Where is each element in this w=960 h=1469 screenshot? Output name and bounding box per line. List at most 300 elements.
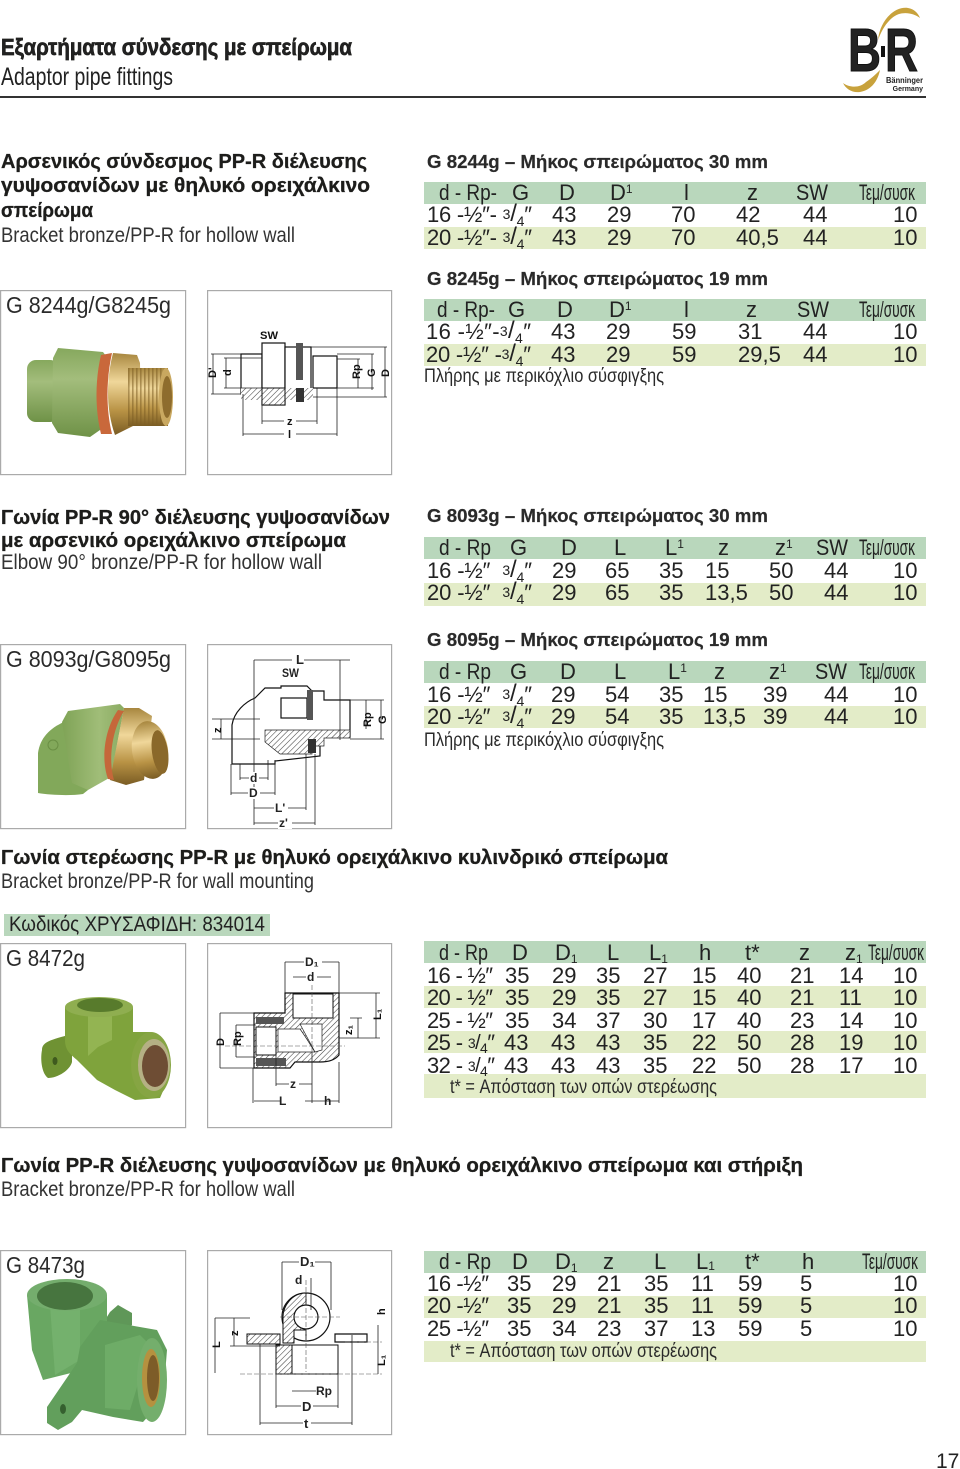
table: G 8245g: 20 -½″ - <box>426 342 502 367</box>
table: G 8093g: 29 <box>552 580 576 605</box>
table: G 8245g: SW <box>797 297 829 322</box>
table: G 8095g: z <box>769 659 780 684</box>
heading: Bracket bronze/PP-R for wall mounting <box>1 870 314 893</box>
table: G 8095g: 3 <box>502 686 510 702</box>
table: G 8093g: 15 <box>705 558 729 583</box>
table: G 8245g: 44 <box>803 342 827 367</box>
table: G 8095g: 29 <box>551 682 575 707</box>
table: G 8473g: 25 -½″ <box>427 1316 489 1341</box>
table: G 8245g: G <box>508 297 525 322</box>
table: G 8095g: 10 <box>893 682 917 707</box>
table: G 8472g: 43 <box>551 1030 575 1055</box>
table: G 8095g: 3 <box>502 708 510 724</box>
table: G 8245g: G 8245g – Μήκος σπειρώματος 19 mm <box>427 269 768 289</box>
table: G 8472g: Τεμ/συσκ <box>868 940 925 965</box>
table: G 8093g: 44 <box>824 558 848 583</box>
table: G 8095g: 54 <box>605 704 629 729</box>
panel: dimension drawing: L <box>296 652 304 667</box>
table: G 8472g: ″ <box>487 1030 495 1055</box>
table: G 8244g: 3 <box>503 229 511 245</box>
panel: dimension drawing: D₁ <box>305 955 319 969</box>
logo: Bänninger Germany <box>843 8 924 93</box>
table: G 8245g: d - Rp- <box>437 297 495 322</box>
table: G 8093g: 10 <box>893 580 917 605</box>
table: G 8095g: 39 <box>763 682 787 707</box>
table: G 8473g: L <box>654 1249 666 1274</box>
panel: dimension drawing: z <box>290 1077 296 1091</box>
table: G 8472g: 1 <box>571 952 578 966</box>
table: G 8244g: 29 <box>607 202 631 227</box>
heading: Γωνία στερέωσης PP-R με θηλυκό ορειχάλκινο κυλινδρικό σπείρωμα <box>1 847 669 869</box>
panel: dimension drawing: G <box>377 715 389 724</box>
table: G 8093g <box>424 506 926 607</box>
table: G 8095g: 15 <box>703 682 727 707</box>
table: G 8472g: 22 <box>692 1053 716 1078</box>
table: G 8473g: 5 <box>800 1293 812 1318</box>
table: G 8245g: 4 <box>515 330 523 346</box>
table: G 8244g: 44 <box>803 202 827 227</box>
table: G 8473g: 20 -½″ <box>427 1293 489 1318</box>
table: G 8244g: 16 -½″- <box>427 202 497 227</box>
table: G 8472g: 17 <box>839 1053 863 1078</box>
panel: product photo G 8093g/G8095g: G 8093g/G8095g <box>6 646 171 672</box>
table: G 8244g: 4 <box>517 213 525 229</box>
table: G 8472g: 10 <box>893 985 917 1010</box>
panel: product photo G 8472g: G 8472g <box>6 945 85 971</box>
panel: dimension drawing: D <box>380 369 392 377</box>
table: G 8244g: D <box>610 180 626 205</box>
table: G 8244g: 20 -½″- <box>427 225 497 250</box>
table: G 8472g: L <box>649 940 661 965</box>
table: G 8093g: 4 <box>517 591 525 607</box>
table: G 8472g: 10 <box>893 963 917 988</box>
table: G 8244g: Τεμ/συσκ <box>859 180 916 205</box>
panel: dimension drawing: d <box>295 1273 302 1287</box>
table: G 8472g: 4 <box>480 1040 488 1056</box>
panel: dimension drawing: z <box>229 1330 241 1336</box>
table: G 8472g: 43 <box>596 1030 620 1055</box>
table: G 8245g: 29,5 <box>738 342 781 367</box>
table: G 8095g: 39 <box>763 704 787 729</box>
table: G 8473g: 10 <box>893 1271 917 1296</box>
section: elbow 90 for hollow wall <box>1 506 926 830</box>
panel: dimension drawing: z <box>212 727 224 733</box>
table: G 8244g: l <box>684 180 689 205</box>
heading: σπείρωμα <box>1 200 94 222</box>
table: G 8472g: 15 <box>692 985 716 1010</box>
table: G 8473g: 13 <box>691 1316 715 1341</box>
table: G 8244g <box>424 152 926 252</box>
table: G 8095g: 54 <box>605 682 629 707</box>
table: G 8244g: / <box>510 200 517 227</box>
table: G 8473g: 10 <box>893 1316 917 1341</box>
table: G 8245g: D <box>557 297 573 322</box>
table: G 8244g: d - Rp- <box>439 180 497 205</box>
table: G 8245g: 31 <box>738 319 762 344</box>
table: G 8473g: 59 <box>738 1271 762 1296</box>
table: G 8472g: / <box>475 1032 481 1054</box>
table: G 8244g: 10 <box>893 225 917 250</box>
table: G 8093g: 50 <box>769 558 793 583</box>
table: G 8472g: 20 - ½″ <box>427 985 493 1010</box>
heading: Elbow 90° bronze/PP-R for hollow wall <box>1 551 322 574</box>
panel: dimension drawing: Rp <box>232 1031 244 1046</box>
table: G 8473g: 59 <box>738 1316 762 1341</box>
table: G 8245g: 43 <box>551 319 575 344</box>
table: G 8245g: 3 <box>500 323 508 339</box>
table: G 8093g: 13,5 <box>705 580 748 605</box>
panel: dimension drawing: d <box>250 771 257 785</box>
table: G 8472g: 10 <box>893 1053 917 1078</box>
table: G 8245g: 44 <box>803 319 827 344</box>
table: G 8245g: 10 <box>893 342 917 367</box>
table: G 8472g: 50 <box>737 1030 761 1055</box>
table: G 8472g: 22 <box>692 1030 716 1055</box>
table: G 8472g: 1 <box>856 952 863 966</box>
panel: dimension drawing: L' <box>275 801 285 815</box>
table: G 8095g: 35 <box>659 704 683 729</box>
table: G 8244g: 43 <box>552 225 576 250</box>
table: G 8095g: 35 <box>659 682 683 707</box>
table: G 8244g: 43 <box>552 202 576 227</box>
table: G 8093g: G <box>510 535 527 560</box>
table: G 8244g: 29 <box>607 225 631 250</box>
table: G 8473g: d - Rp <box>439 1249 491 1274</box>
table: G 8095g: z <box>714 659 725 684</box>
table: G 8244g: 40,5 <box>736 225 779 250</box>
heading: με αρσενικό ορειχάλκινο σπείρωμα <box>1 530 347 552</box>
table: G 8244g: ″ <box>524 225 532 250</box>
table: G 8245g: 10 <box>893 319 917 344</box>
table: G 8473g: 1 <box>708 1259 715 1273</box>
table: G 8473g: 23 <box>597 1316 621 1341</box>
logo: Bänninger Germany: B <box>848 16 881 84</box>
table: G 8093g: 3 <box>502 584 510 600</box>
table: G 8472g: 35 <box>643 1053 667 1078</box>
table: G 8095g: 1 <box>780 661 787 675</box>
panel: dimension drawing: D <box>249 786 258 800</box>
table: G 8095g: G 8095g – Μήκος σπειρώματος 19 mm <box>427 630 768 650</box>
panel: dimension drawing <box>208 645 392 830</box>
table: G 8245g: 29 <box>606 342 630 367</box>
panel: dimension drawing: D <box>215 1038 227 1046</box>
panel: dimension drawing: L <box>211 1341 223 1348</box>
panel: dimension drawing: h <box>376 1308 388 1315</box>
table: G 8093g: 65 <box>605 580 629 605</box>
table: G 8473g: 37 <box>644 1316 668 1341</box>
table: G 8093g: L <box>614 535 626 560</box>
table: G 8093g: 65 <box>605 558 629 583</box>
table: G 8473g: 11 <box>691 1271 714 1296</box>
table: G 8472g: D <box>555 940 571 965</box>
table: G 8095g: 20 -½″ <box>427 704 490 729</box>
table: G 8472g: 3 <box>468 1035 476 1051</box>
table: G 8473g: 10 <box>893 1293 917 1318</box>
heading <box>1 151 370 247</box>
table: G 8472g: 43 <box>551 1053 575 1078</box>
logo: Bänninger Germany: R <box>885 16 918 84</box>
table: G 8472g: 16 - ½″ <box>427 963 493 988</box>
table: G 8244g: 42 <box>736 202 760 227</box>
table: G 8095g: 4 <box>517 715 525 731</box>
table: G 8245g: ″ <box>523 342 531 367</box>
table: G 8473g: 35 <box>644 1293 668 1318</box>
panel: dimension drawing: SW <box>282 666 300 680</box>
table: G 8245g: ″ <box>523 319 531 344</box>
panel: product photo G 8244g/G8245g: G 8244g/G8245g <box>6 292 171 318</box>
table: G 8472g: 25 - <box>427 1030 463 1055</box>
panel: dimension drawing: l <box>288 429 291 441</box>
table: G 8473g: 34 <box>552 1316 576 1341</box>
table: G 8472g: 10 <box>893 1030 917 1055</box>
table: G 8093g: 20 -½″ <box>427 580 490 605</box>
table: G 8244g: / <box>510 223 517 250</box>
title: Εξαρτήματα σύνδεσης με σπείρωμα <box>1 34 352 60</box>
section: hollow wall elbow with support <box>1 1155 926 1435</box>
heading: Αρσενικός σύνδεσμος PP-R διέλευσης <box>1 151 367 173</box>
table: G 8472g: 25 - ½″ <box>427 1008 493 1033</box>
table: G 8472g: 21 <box>790 985 814 1010</box>
table: G 8473g: 16 -½″ <box>427 1271 489 1296</box>
logo: Bänninger Germany: Germany <box>893 86 923 93</box>
table: G 8472g: 14 <box>839 1008 863 1033</box>
table: G 8472g: 15 <box>692 963 716 988</box>
table: G 8093g: ″ <box>524 580 532 605</box>
table: G 8244g: 10 <box>893 202 917 227</box>
table: G 8473g <box>424 1249 926 1362</box>
table: G 8095g: Πλήρης με περικόχλιο σύσφιγξης <box>424 730 664 751</box>
table: G 8095g: D <box>560 659 576 684</box>
table: G 8472g: / <box>475 1055 481 1077</box>
table: G 8093g: z <box>718 535 729 560</box>
table: G 8245g: 59 <box>672 342 696 367</box>
table: G 8473g: 35 <box>644 1271 668 1296</box>
panel: dimension drawing: D <box>302 1399 311 1414</box>
table: G 8244g: 1 <box>626 182 633 196</box>
table: G 8245g: Πλήρης με περικόχλιο σύσφιγξης <box>424 366 664 387</box>
table: G 8093g: 35 <box>659 558 683 583</box>
table: G 8472g: 28 <box>790 1053 814 1078</box>
table: G 8472g: 43 <box>596 1053 620 1078</box>
table: G 8473g: z <box>603 1249 614 1274</box>
title <box>1 34 352 91</box>
table: G 8093g: 1 <box>786 537 793 551</box>
table: G 8472g: 21 <box>790 963 814 988</box>
panel: dimension drawing: L <box>279 1094 286 1108</box>
table: G 8472g: 19 <box>839 1030 863 1055</box>
table: G 8093g: 50 <box>769 580 793 605</box>
table: G 8473g: D <box>555 1249 571 1274</box>
supplier code badge: Κωδικός ΧΡΥΣΑΦΙΔΗ: 834014 <box>9 913 265 936</box>
table: G 8472g: 4 <box>480 1063 488 1079</box>
table: G 8245g <box>424 269 926 387</box>
table: G 8473g: 35 <box>507 1271 531 1296</box>
table: G 8473g: 35 <box>507 1293 531 1318</box>
table: G 8095g: 4 <box>517 693 525 709</box>
table: G 8472g: 40 <box>737 1008 761 1033</box>
panel: dimension drawing: z₁ <box>343 1024 355 1035</box>
panel: product photo G 8473g <box>1 1251 186 1435</box>
table: G 8095g: SW <box>815 659 847 684</box>
table: G 8245g: Τεμ/συσκ <box>859 297 916 322</box>
panel: dimension drawing <box>208 944 392 1128</box>
table: G 8244g: 44 <box>803 225 827 250</box>
table: G 8472g: 17 <box>692 1008 716 1033</box>
panel: dimension drawing: d <box>222 369 234 376</box>
table: G 8093g: / <box>510 578 517 605</box>
table: G 8245g: 29 <box>606 319 630 344</box>
panel: dimension drawing: G <box>366 368 378 377</box>
heading <box>1 847 669 893</box>
table: G 8472g: L <box>607 940 619 965</box>
panel: dimension drawing <box>207 291 392 475</box>
table: G 8095g: 13,5 <box>703 704 746 729</box>
table: G 8244g: 3 <box>503 206 511 222</box>
table: G 8472g: t* = Απόσταση των οπών στερέωσης <box>450 1077 717 1098</box>
table: G 8472g: 29 <box>552 963 576 988</box>
heading <box>1 507 390 574</box>
table: G 8473g: D <box>512 1249 528 1274</box>
table: G 8095g: / <box>510 680 517 707</box>
panel: dimension drawing: L₁ <box>372 1008 384 1020</box>
table: G 8093g: 10 <box>893 558 917 583</box>
panel: product photo G 8473g: G 8473g <box>6 1252 85 1278</box>
table: G 8244g: SW <box>796 180 828 205</box>
table: G 8472g: 37 <box>596 1008 620 1033</box>
table: G 8473g: 21 <box>597 1293 621 1318</box>
panel: product photo G 8472g <box>1 944 186 1128</box>
table: G 8472g: 1 <box>661 952 668 966</box>
panel: dimension drawing <box>208 1251 392 1435</box>
table: G 8095g: 29 <box>551 704 575 729</box>
table: G 8244g: z <box>747 180 758 205</box>
heading: Γωνία PP-R διέλευσης γυψοσανίδων με θηλυκό ορειχάλκινο σπείρωμα και στήριξη <box>1 1155 803 1177</box>
table: G 8095g: G <box>510 659 527 684</box>
table: G 8472g: D <box>512 940 528 965</box>
table: G 8472g: 34 <box>552 1008 576 1033</box>
table: G 8093g: 3 <box>502 562 510 578</box>
table: G 8472g: 35 <box>505 985 529 1010</box>
table: G 8093g: 35 <box>659 580 683 605</box>
table: G 8473g: 29 <box>552 1293 576 1318</box>
table: G 8093g: 4 <box>517 569 525 585</box>
panel: dimension drawing: z' <box>279 816 288 830</box>
table: G 8244g: 4 <box>517 236 525 252</box>
logo: Bänninger Germany: Bänninger <box>886 75 924 85</box>
table: G 8473g: 5 <box>800 1271 812 1296</box>
table: G 8244g: G 8244g – Μήκος σπειρώματος 30 mm <box>427 152 768 172</box>
table: G 8095g: 44 <box>824 704 848 729</box>
table: G 8472g: z <box>845 940 856 965</box>
table: G 8472g: 35 <box>643 1030 667 1055</box>
table: G 8245g: 3 <box>502 346 510 362</box>
heading: Γωνία PP-R 90° διέλευσης γυψοσανίδων <box>1 507 390 529</box>
table: G 8472g: h <box>699 940 711 965</box>
table: G 8472g: 32 - <box>427 1053 463 1078</box>
table: G 8095g: 1 <box>680 661 687 675</box>
table: G 8472g: 27 <box>643 985 667 1010</box>
table: G 8095g: ″ <box>524 682 532 707</box>
table: G 8472g: d - Rp <box>439 940 488 965</box>
table: G 8093g: 44 <box>824 580 848 605</box>
table: G 8472g: 23 <box>790 1008 814 1033</box>
table: G 8095g: 10 <box>893 704 917 729</box>
table: G 8095g: ″ <box>524 704 532 729</box>
panel: dimension drawing: L₁ <box>376 1354 388 1366</box>
heading <box>1 1155 803 1201</box>
table: G 8093g: 29 <box>552 558 576 583</box>
table: G 8245g: l <box>684 297 689 322</box>
table: G 8093g: d - Rp <box>439 535 491 560</box>
table: G 8473g: t* = Απόσταση των οπών στερέωσης <box>450 1341 717 1362</box>
table: G 8473g: Τεμ/συσκ <box>862 1249 919 1274</box>
table: G 8245g: D <box>609 297 625 322</box>
table: G 8472g: 11 <box>839 985 862 1010</box>
panel: dimension drawing: z <box>287 416 293 428</box>
table: G 8093g: z <box>775 535 786 560</box>
table: G 8472g: 10 <box>893 1008 917 1033</box>
table: G 8472g: 43 <box>504 1053 528 1078</box>
table: G 8095g: / <box>510 702 517 729</box>
table: G 8472g: ″ <box>487 1053 495 1078</box>
section: wall mounting elbow <box>1 847 926 1128</box>
table: G 8472g: z <box>799 940 810 965</box>
table: G 8472g: 50 <box>737 1053 761 1078</box>
table: G 8473g: 5 <box>800 1316 812 1341</box>
table: G 8472g: t* <box>745 940 760 965</box>
table: G 8095g: Τεμ/συσκ <box>859 659 916 684</box>
panel: dimension drawing: SW <box>260 330 279 342</box>
table: G 8472g: 40 <box>737 963 761 988</box>
table: G 8473g: L <box>696 1249 708 1274</box>
table: G 8093g: SW <box>816 535 848 560</box>
panel: dimension drawing: Rp <box>351 364 363 379</box>
panel: dimension drawing: d <box>307 970 314 984</box>
table: G 8245g: / <box>508 317 515 344</box>
table: G 8093g: D <box>561 535 577 560</box>
table: G 8245g: z <box>746 297 757 322</box>
table: G 8473g: 21 <box>597 1271 621 1296</box>
table: G 8472g <box>424 940 926 1098</box>
table: G 8473g: 1 <box>571 1261 578 1275</box>
table: G 8095g <box>424 630 926 751</box>
table: G 8473g: h <box>802 1249 814 1274</box>
table: G 8472g: 29 <box>552 985 576 1010</box>
table: G 8473g: 29 <box>552 1271 576 1296</box>
table: G 8093g: G 8093g – Μήκος σπειρώματος 30 mm <box>427 506 768 526</box>
table: G 8473g: 35 <box>507 1316 531 1341</box>
title: Adaptor pipe fittings <box>1 63 173 91</box>
table: G 8244g: 70 <box>671 225 695 250</box>
table: G 8093g: L <box>665 535 677 560</box>
panel: dimension drawing: Rp <box>362 712 374 727</box>
panel: dimension drawing: Rp <box>316 1384 332 1398</box>
panel: dimension drawing: D₁ <box>300 1254 315 1269</box>
table: G 8093g: / <box>510 556 517 583</box>
table: G 8245g: 59 <box>672 319 696 344</box>
table: G 8245g: 43 <box>551 342 575 367</box>
table: G 8245g: 16 -½″- <box>426 319 500 344</box>
table: G 8244g: D <box>559 180 575 205</box>
heading: γυψοσανίδων με θηλυκό ορειχάλκινο <box>1 175 370 197</box>
table: G 8244g: 70 <box>671 202 695 227</box>
table: G 8095g: 44 <box>824 682 848 707</box>
table: G 8472g: 43 <box>504 1030 528 1055</box>
table: G 8472g: 35 <box>505 1008 529 1033</box>
table: G 8095g: 16 -½″ <box>427 682 490 707</box>
table: G 8245g: 1 <box>625 299 632 313</box>
table: G 8093g: 1 <box>677 537 684 551</box>
